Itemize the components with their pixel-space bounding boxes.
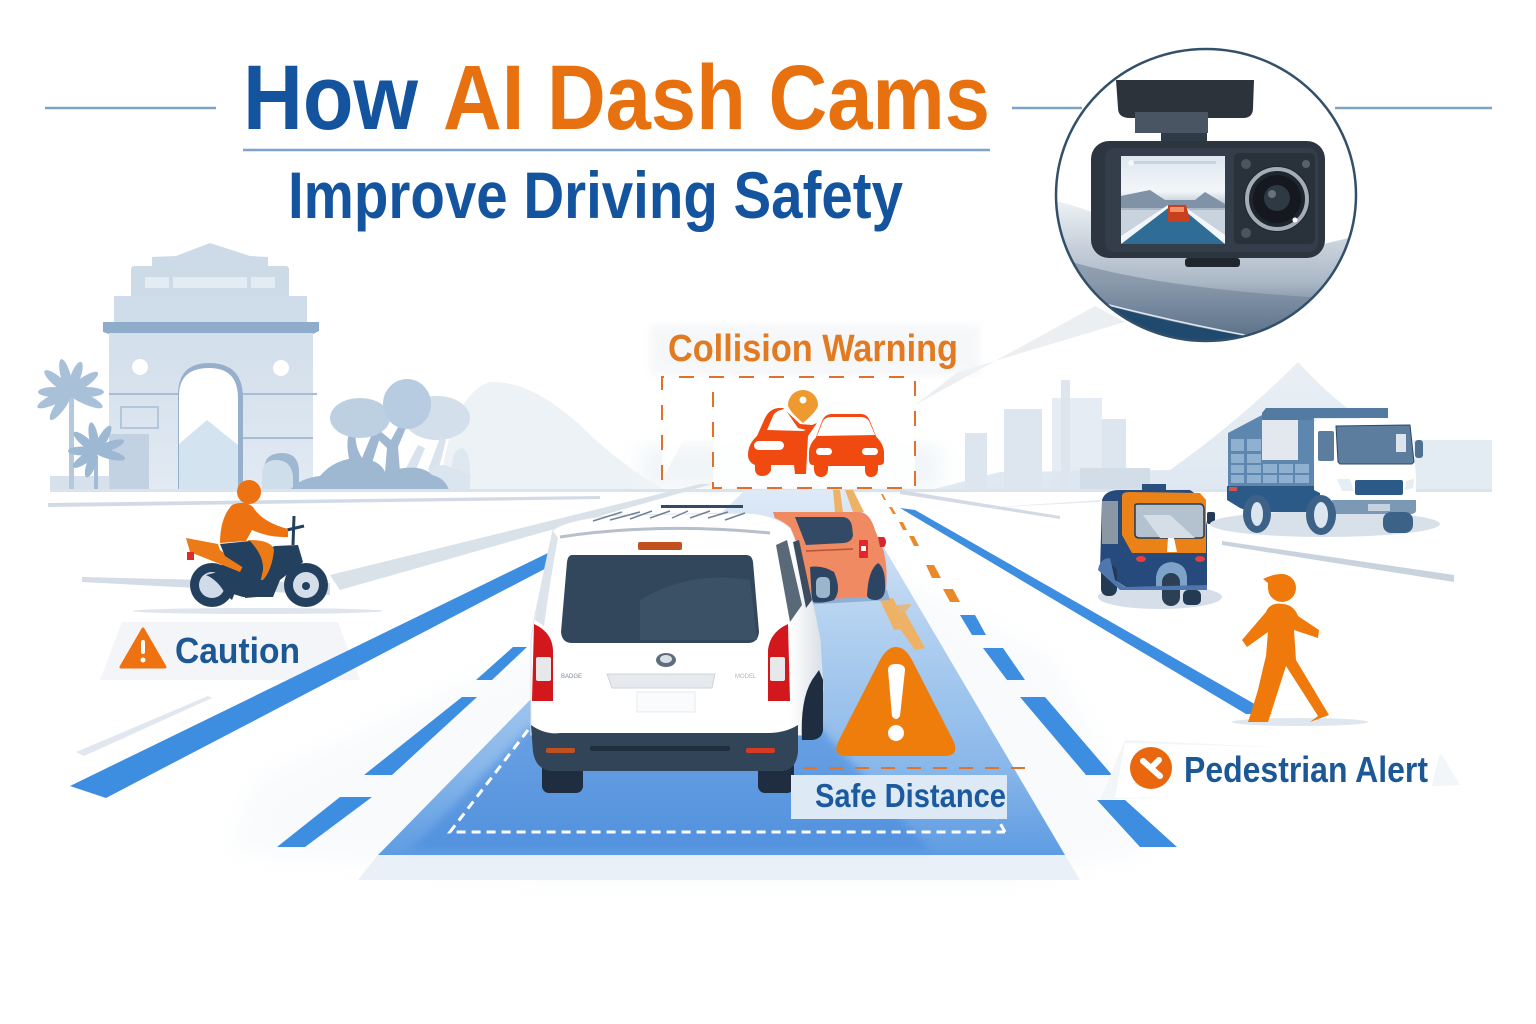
seat: [186, 538, 243, 572]
label: caution: Caution: [175, 630, 300, 671]
motorcycle rider: [133, 480, 383, 614]
van body: [531, 513, 823, 735]
blue safety zone: [378, 490, 1065, 855]
beam from dash cam: [915, 306, 1125, 405]
emblem and handle: [561, 653, 757, 712]
label: safe distance: [791, 768, 1036, 819]
label: pedestrian alert: [1100, 740, 1460, 800]
emblem and handle: MODEL: [735, 674, 757, 680]
label: caution: [100, 622, 360, 680]
label: safe distance: Safe Distance: [815, 777, 1006, 814]
wheels: [1243, 495, 1413, 535]
detection frames: [662, 377, 915, 488]
title: [45, 47, 1492, 232]
camera body: [1091, 141, 1325, 258]
mountains and haze: [440, 362, 1492, 490]
icon: two cars collision: [748, 390, 885, 478]
label: pedestrian alert: Pedestrian Alert: [1184, 749, 1428, 790]
rider: [237, 480, 261, 504]
pedestrian: [1232, 574, 1368, 726]
icon: India Gate: [103, 243, 319, 490]
road side lines: [48, 484, 1454, 756]
title: Improve Driving Safety: [288, 158, 903, 232]
icon: trees and bushes: [290, 379, 470, 490]
label background: [650, 325, 980, 375]
bike body: [220, 545, 303, 597]
white van: [531, 505, 823, 793]
road: [48, 484, 1454, 880]
city towers: [965, 380, 1150, 490]
right lane line: [900, 508, 1272, 714]
icon: location pin: [788, 390, 818, 423]
title: AI Dash Cams: [443, 47, 990, 149]
callout: collision warning: [650, 325, 980, 488]
icon: warning triangle: [121, 629, 165, 667]
wheels: [190, 563, 234, 607]
roof rails: [593, 511, 745, 521]
auto rickshaw: [1098, 484, 1222, 609]
rear window: [561, 555, 759, 643]
title: How: [243, 47, 418, 149]
camera lens: [1234, 153, 1315, 244]
orange dashes right: [881, 494, 960, 602]
camera screen: [1121, 156, 1225, 244]
safe distance dashed frame: [450, 730, 1005, 832]
side wheel: [802, 670, 823, 740]
large warning triangle: [836, 647, 955, 756]
icon: alert badge: [1130, 747, 1172, 789]
rear wheels: [542, 760, 794, 793]
heading: collision warning: Collision Warning: [668, 328, 958, 370]
ground shadow zone: [230, 580, 1150, 880]
tail lights: [532, 624, 790, 701]
callout: dash cam lens: [1050, 49, 1360, 350]
brake light: [638, 542, 682, 550]
orange car: [773, 512, 890, 605]
left lane line: [70, 553, 556, 798]
dashboard: [1058, 202, 1348, 336]
bumper: [531, 725, 798, 771]
camera mount: [1116, 80, 1254, 143]
truck: [1210, 408, 1440, 537]
distant haze right: [1400, 440, 1492, 490]
cargo: [1228, 415, 1314, 490]
icon: palm trees: [35, 358, 126, 490]
right dashes: [960, 615, 1177, 847]
chassis: [1227, 486, 1320, 512]
side windows: [776, 540, 802, 622]
skyline background: [35, 243, 1492, 492]
cab: [1314, 418, 1416, 502]
orange center markings: [833, 490, 925, 650]
left dashes: [277, 647, 527, 847]
rear door top edge: [560, 528, 770, 537]
emblem and handle: BADGE: [561, 674, 582, 680]
